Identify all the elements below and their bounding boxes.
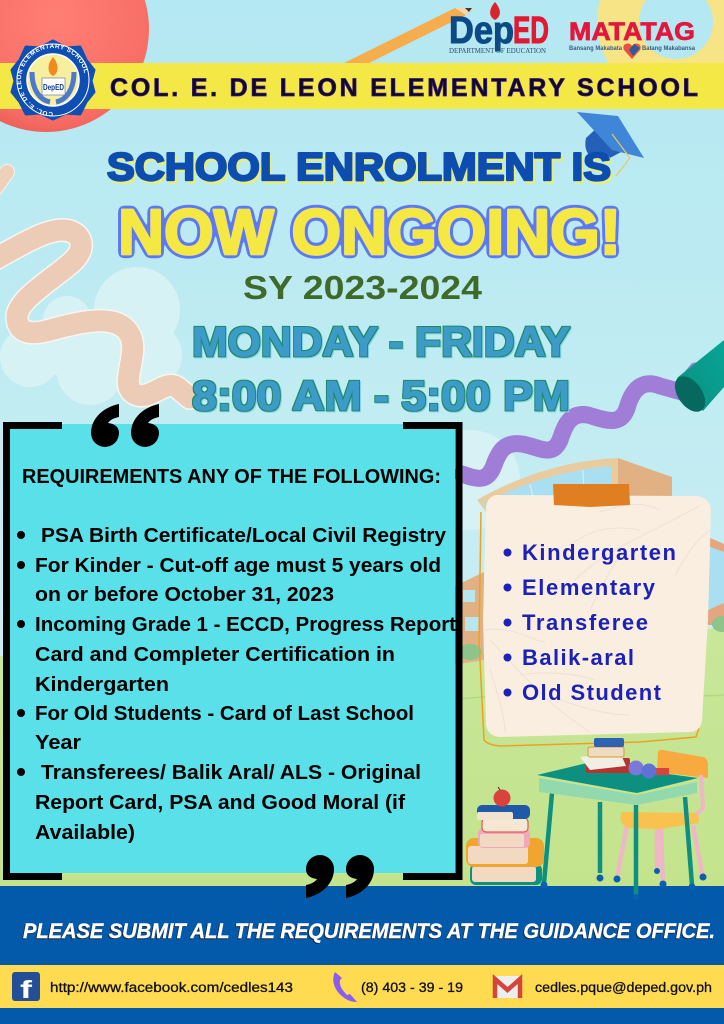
blue footer band [0,886,724,1024]
yellow ring [618,0,724,80]
list: grade levels: Kindergarten [522,540,676,565]
purple squiggle [462,368,695,478]
icon: book stack with apple [466,787,544,885]
requirements list: Available) [35,821,135,844]
icon: closing quote marks [306,855,374,898]
requirements list: For Kinder - Cut-off age must 5 years old [35,554,441,577]
MATATAG logo: Batang Makabansa [642,45,695,52]
icon: facebook: f [20,976,33,1004]
email address: cedles.pque@deped.gov.ph [535,980,712,995]
heading: school enrolment is: SCHOOL ENROLMENT IS [107,146,611,189]
DepEd logo: DEPARTMENT OF EDUCATION [449,46,547,55]
MATATAG logo [569,18,695,59]
requirements list: Report Card, PSA and Good Moral (if [35,791,405,814]
phone number: (8) 403 - 39 - 19 [361,980,463,995]
list: grade levels: Balik-aral [522,645,634,670]
list: grade levels: Elementary [522,575,656,600]
school seal: COL. E. DE LEON ELEMENTARY SCHOOL [16,44,88,116]
list: grade levels: Transferee [522,610,648,635]
background clouds [0,267,520,530]
requirements heading: REQUIREMENTS ANY OF THE FOLLOWING: [22,466,441,488]
icon: school chair [614,750,708,888]
icon: gmail [493,976,522,998]
school name: COL. E. DE LEON ELEMENTARY SCHOOL [110,74,698,102]
frame right bracket [403,426,459,876]
icon: books on desk [580,738,630,773]
days: MONDAY - FRIDAY [192,318,570,365]
school building illustration [453,458,724,665]
red ball [0,0,149,132]
heading: now ongoing: NOW ONGOING! [118,196,621,268]
contact bar [0,965,724,1008]
list: grade levels [504,540,676,705]
icon: facebook [12,972,40,1004]
MATATAG logo: Bansang Makabata [569,45,622,52]
graduation cap [577,112,644,176]
DepEd logo: ED [513,10,549,52]
hours: 8:00 AM - 5:00 PM [192,372,570,419]
requirements list: Incoming Grade 1 - ECCD, Progress Report [35,613,456,636]
panel: note with grade levels [479,484,711,746]
teal cylinder [669,340,724,417]
DepEd logo: Dep [449,10,514,52]
pencil [344,8,472,63]
requirements list: Year [35,731,81,754]
requirements list [17,524,456,844]
beige squiggle [0,172,190,398]
DepEd logo [449,2,549,55]
panel: requirements [6,424,459,876]
requirements list: Transferees/ Balik Aral/ ALS - Original [41,761,421,784]
requirements list: Kindergarten [35,673,169,696]
tape [553,484,630,507]
MATATAG logo: MATATAG [569,18,695,46]
icon: teal desk [537,763,698,900]
school year: SY 2023-2024 [243,269,483,306]
requirements list: PSA Birth Certificate/Local Civil Registry [41,524,447,547]
icon: phone [333,972,357,1002]
list: grade levels: Old Student [522,680,662,705]
frame left bracket [6,426,62,876]
facebook link: http://www.facebook.com/cedles143 [50,980,293,995]
requirements list: on or before October 31, 2023 [35,583,334,606]
requirements list: Card and Completer Certification in [35,643,395,666]
school seal: DepED [43,82,64,92]
yellow school band [0,63,724,109]
icon: opening quote marks [91,404,159,447]
background lawn [0,628,724,890]
requirements list: For Old Students - Card of Last School [35,702,414,725]
icon: headphones [628,760,669,778]
